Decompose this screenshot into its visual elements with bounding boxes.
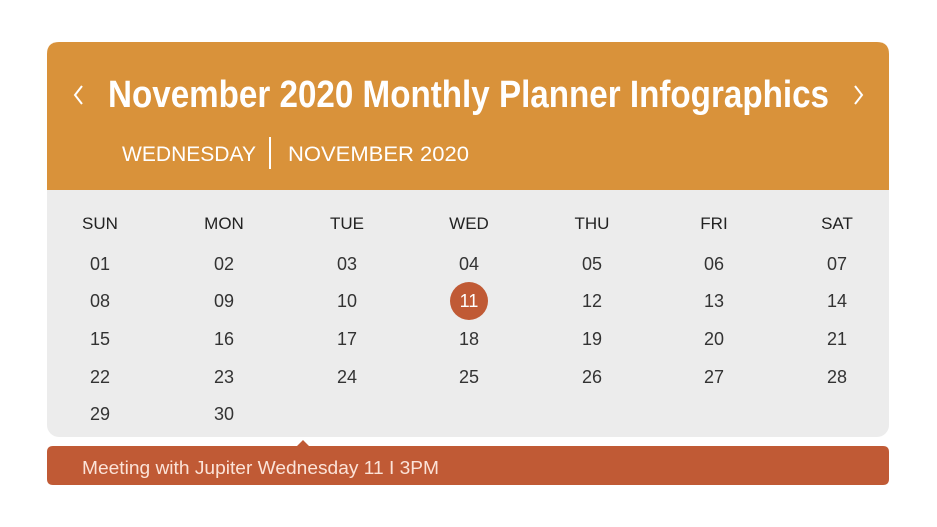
weekday headers: FRI — [700, 214, 728, 233]
subtitle — [122, 137, 469, 169]
dates grid: 04 — [459, 254, 479, 274]
dates grid: 28 — [827, 367, 847, 387]
dates grid: 05 — [582, 254, 602, 274]
weekday headers: WED — [449, 214, 489, 233]
dates grid: 24 — [337, 367, 357, 387]
highlight: day 11 — [450, 282, 488, 320]
callout: meeting bar — [47, 440, 889, 485]
weekday headers: SAT — [821, 214, 853, 233]
dates grid: 23 — [214, 367, 234, 387]
dates grid: 20 — [704, 329, 724, 349]
dates grid: 30 — [214, 404, 234, 424]
dates grid: 22 — [90, 367, 110, 387]
dates grid: 12 — [582, 291, 602, 311]
icon: right arrow — [855, 86, 862, 104]
dates grid: 01 — [90, 254, 110, 274]
dates grid: 03 — [337, 254, 357, 274]
weekday headers — [82, 214, 853, 233]
dates grid: 08 — [90, 291, 110, 311]
dates grid: 14 — [827, 291, 847, 311]
dates grid: 21 — [827, 329, 847, 349]
weekday headers: SUN — [82, 214, 118, 233]
callout: meeting bar: Meeting with Jupiter Wednesday 11 I 3PM — [82, 458, 439, 478]
dates grid: 07 — [827, 254, 847, 274]
weekday headers: MON — [204, 214, 244, 233]
dates grid — [90, 254, 847, 424]
dates grid: 27 — [704, 367, 724, 387]
header band — [47, 42, 889, 190]
dates grid: 11 — [460, 291, 478, 311]
dates grid: 18 — [459, 329, 479, 349]
dates grid: 15 — [90, 329, 110, 349]
subtitle: WEDNESDAY — [122, 143, 256, 166]
dates grid: 02 — [214, 254, 234, 274]
dates grid: 25 — [459, 367, 479, 387]
weekday headers: TUE — [330, 214, 364, 233]
dates grid: 10 — [337, 291, 357, 311]
dates grid: 29 — [90, 404, 110, 424]
icon: left arrow — [75, 86, 82, 104]
dates grid: 09 — [214, 291, 234, 311]
title: November 2020 Monthly Planner Infographics — [108, 74, 829, 116]
dates grid: 19 — [582, 329, 602, 349]
dates grid: 13 — [704, 291, 724, 311]
weekday headers: THU — [575, 214, 609, 233]
subtitle: NOVEMBER 2020 — [288, 143, 469, 166]
dates grid: 06 — [704, 254, 724, 274]
dates grid: 17 — [337, 329, 357, 349]
panel: calendar — [47, 42, 889, 437]
dates grid: 26 — [582, 367, 602, 387]
dates grid: 16 — [214, 329, 234, 349]
